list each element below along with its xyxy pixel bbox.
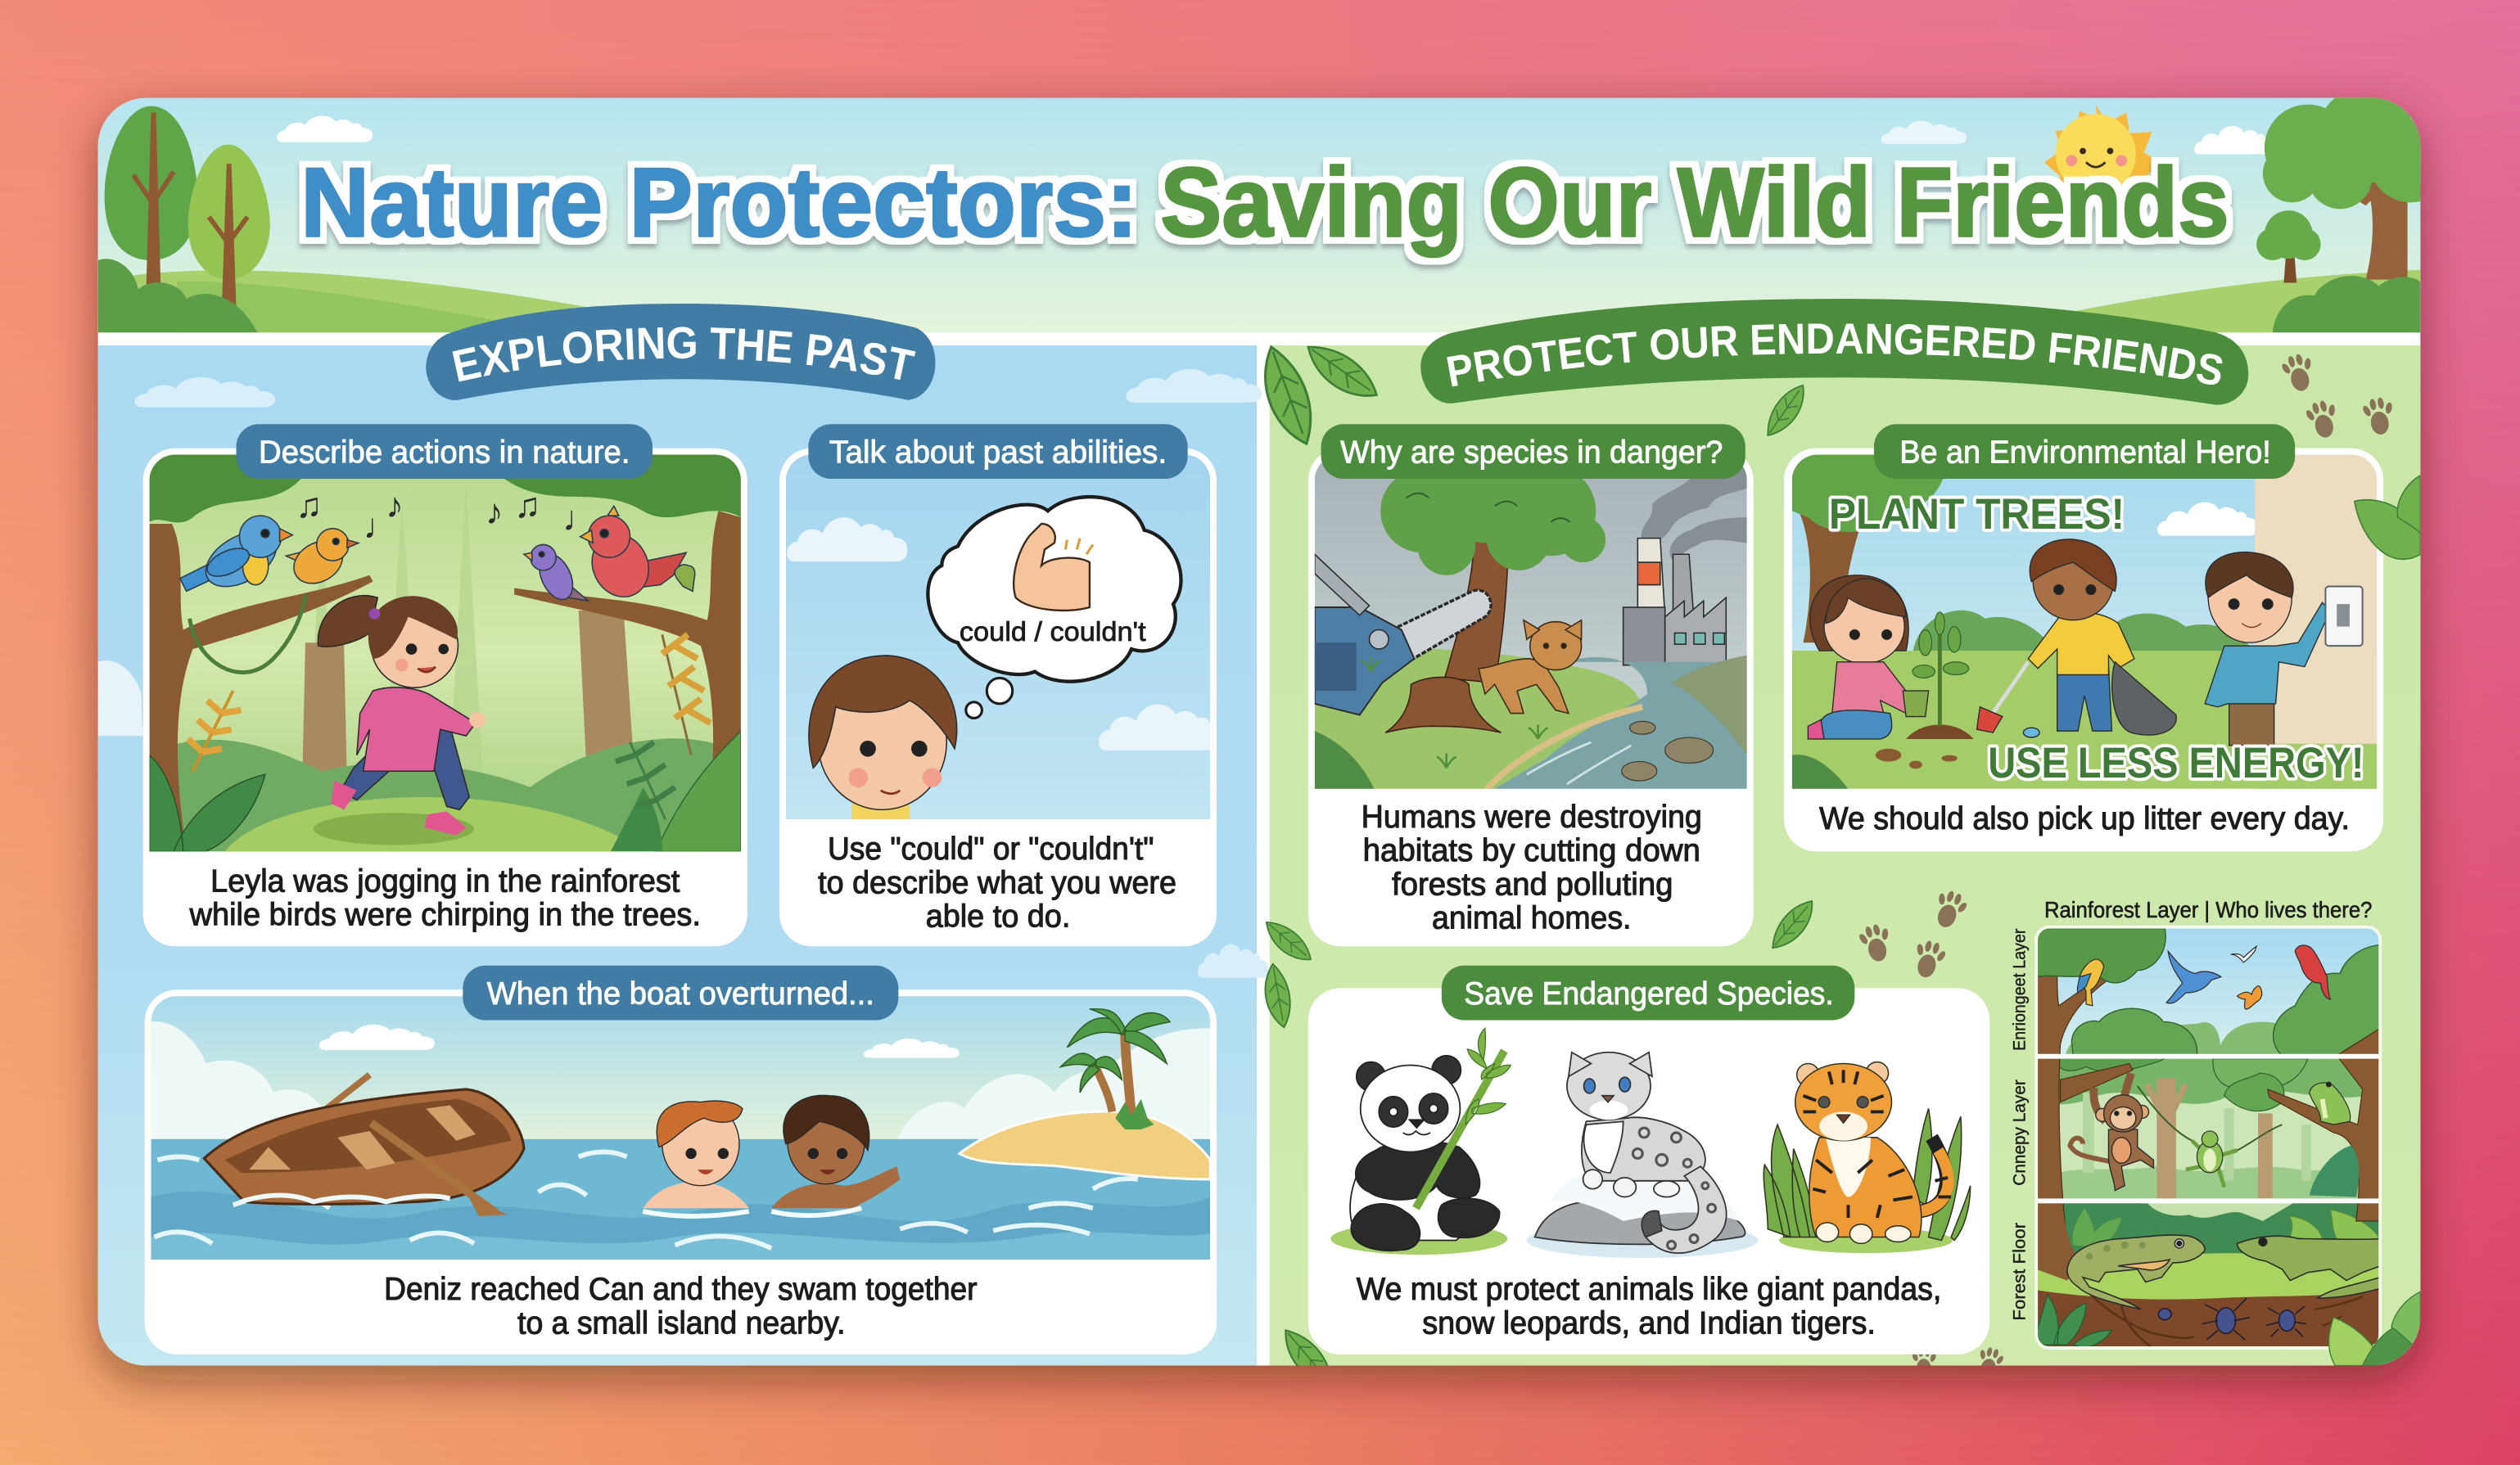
edge leaf upper right	[2355, 476, 2420, 559]
rainforest layers chart	[2008, 897, 2380, 1351]
swimmers	[643, 1095, 900, 1216]
caption	[818, 831, 1176, 935]
caption	[1357, 1271, 1941, 1341]
caption	[384, 1271, 978, 1341]
caption: We must protect animals like giant pandas,	[1357, 1271, 1941, 1307]
left trees	[105, 106, 270, 309]
panel: be an environmental hero	[1784, 424, 2383, 851]
flying birds and butterfly	[2077, 945, 2330, 1009]
pill label: Describe actions in nature.	[259, 434, 630, 470]
pill label: Save Endangered Species.	[1464, 976, 1834, 1012]
pill label	[237, 424, 653, 479]
wooden boat	[204, 1075, 524, 1216]
leaves and paw prints	[1252, 336, 2398, 1393]
corner and edge leaves	[2328, 476, 2420, 1366]
icon: light switch	[2325, 587, 2363, 646]
caption: forests and polluting	[1392, 866, 1673, 902]
canopy background	[2036, 1056, 2380, 1108]
caption: Deniz reached Can and they swam together	[384, 1271, 978, 1307]
monkey	[2070, 1073, 2153, 1191]
tree being cut	[1380, 447, 1605, 683]
title: blue part: Nature Protectors:	[300, 149, 1138, 258]
vines	[2138, 1086, 2282, 1151]
caption: to a small island nearby.	[517, 1305, 846, 1341]
big right tree	[2263, 98, 2420, 280]
title	[300, 149, 2229, 258]
pill label: When the boat overturned...	[487, 976, 874, 1012]
illustration: panda	[1330, 1028, 1511, 1255]
icon: flexed bicep	[1014, 524, 1093, 611]
illustration: children helping the environment	[1792, 455, 2377, 789]
floor plants	[2073, 1208, 2121, 1250]
heading banner: protect our endangered friends: PROTECT OUR ENDANGERED FRIENDS	[1447, 324, 2222, 386]
music notes: ♪	[386, 486, 404, 525]
pill label	[1874, 424, 2295, 479]
emergent background bushes	[2065, 1022, 2295, 1056]
music notes: ♪	[485, 493, 503, 532]
heading banner: exploring the past: EXPLORING THE PAST	[452, 327, 915, 381]
caption: Leyla was jogging in the rainforest	[210, 863, 680, 899]
ground and river	[1315, 647, 1642, 789]
thought cloud	[928, 497, 1181, 718]
caption: able to do.	[926, 899, 1070, 935]
caption: habitats by cutting down	[1363, 832, 1700, 868]
sky clouds	[787, 517, 1224, 751]
boy picking litter	[1977, 539, 2176, 737]
spiders	[2158, 1298, 2306, 1340]
girl	[318, 596, 485, 836]
boy face	[809, 656, 957, 819]
distant bushes	[1913, 611, 2255, 659]
trunk over ground	[2036, 1213, 2083, 1281]
layer labels: Forest Floor	[2008, 1223, 2029, 1321]
stump	[1385, 677, 1501, 732]
bottom left floor leaves	[2036, 1295, 2111, 1348]
emergent bushes	[2071, 1008, 2197, 1056]
frogs	[2186, 1082, 2351, 1188]
caption: while birds were chirping in the trees.	[189, 897, 701, 933]
left panel clouds	[134, 369, 1268, 977]
floor background	[2036, 1200, 2380, 1256]
layer labels: Cnnepy Layer	[2008, 1080, 2029, 1186]
emergent tree left	[2036, 964, 2110, 1285]
birds on branches	[180, 506, 695, 606]
slogan: plant trees: PLANT TREES!	[1829, 490, 2125, 539]
fleeing cat	[1479, 620, 1582, 714]
right hill	[2075, 270, 2420, 332]
header banner scenery	[98, 87, 2453, 332]
caption	[1362, 799, 1702, 936]
caption: Use "could" or "couldn't"	[828, 831, 1154, 867]
sapling	[1906, 612, 1974, 739]
smoke	[1642, 466, 1747, 559]
soil	[2036, 1288, 2380, 1351]
left tree	[1792, 455, 1948, 642]
caption: to describe what you were	[818, 864, 1176, 900]
lizards	[2067, 1235, 2380, 1309]
thought cloud: could / couldn't	[960, 617, 1146, 647]
corner leaves bottom right	[2328, 1291, 2420, 1366]
sky clouds	[151, 1021, 1210, 1141]
pill label: Why are species in danger?	[1340, 434, 1723, 470]
caption: snow leopards, and Indian tigers.	[1422, 1305, 1876, 1341]
wall	[2255, 455, 2377, 744]
panel: why are species in danger	[1308, 424, 1754, 946]
pill label: Be an Environmental Hero!	[1899, 434, 2271, 470]
white divider strips	[98, 332, 2420, 345]
tree right	[2268, 1028, 2380, 1221]
pill label	[463, 966, 898, 1021]
left bushes	[98, 259, 257, 332]
left panel background	[98, 345, 1268, 1366]
slogan: use less energy: USE LESS ENERGY!	[1988, 739, 2364, 787]
canopy bushes	[2057, 1056, 2170, 1071]
sandy island and palms	[960, 1009, 1210, 1179]
layer labels: Enriongeet Layer	[2008, 929, 2029, 1051]
caption: We should also pick up litter every day.	[1819, 800, 2350, 836]
header clouds	[278, 115, 2274, 154]
layered forest illustration	[2036, 927, 2380, 1351]
music notes: ♫	[296, 486, 323, 525]
illustration: boy thinking about strength	[786, 455, 1224, 819]
pill label	[1321, 424, 1745, 479]
lime ground	[2036, 1253, 2380, 1305]
illustration: boat, swimmers and island	[151, 996, 1210, 1260]
caption	[189, 863, 701, 933]
panel: save endangered species	[1308, 966, 1989, 1355]
chart title: Rainforest Layer | Who lives there?	[2044, 897, 2372, 922]
illustration: snow leopard	[1527, 1053, 1759, 1258]
left hill	[98, 270, 588, 332]
panel: when the boat overturned	[145, 966, 1217, 1355]
music notes: ♩	[364, 507, 399, 547]
illustration: tiger	[1764, 1062, 1971, 1253]
illustration: chainsaw, factory and polluted river	[1315, 447, 1747, 789]
girl planting	[1808, 575, 1929, 739]
caption: Humans were destroying	[1362, 799, 1702, 835]
factory	[1624, 539, 1726, 665]
illustration: girl jogging in the rainforest	[150, 455, 741, 851]
small right tree	[2256, 210, 2321, 282]
chainsaw	[1315, 554, 1491, 715]
pill label: Talk about past abilities.	[829, 434, 1167, 470]
pill label	[808, 424, 1188, 479]
music notes: ♫	[514, 486, 541, 525]
right bushes	[2273, 276, 2420, 332]
layer dividers	[2036, 1054, 2380, 1203]
panel: describe actions in nature	[143, 424, 747, 946]
caption: animal homes.	[1432, 900, 1631, 936]
music notes	[296, 486, 598, 547]
pill label	[1442, 966, 1854, 1021]
music notes: ♩	[562, 499, 598, 539]
jungle plants	[150, 634, 741, 851]
title: green part: Saving Our Wild Friends	[1160, 149, 2229, 258]
layer labels	[2008, 929, 2029, 1321]
sun	[2044, 105, 2161, 202]
right panel background	[1252, 336, 2420, 1393]
panel: talk about past abilities	[779, 424, 1224, 946]
boy at light switch	[2205, 552, 2330, 746]
